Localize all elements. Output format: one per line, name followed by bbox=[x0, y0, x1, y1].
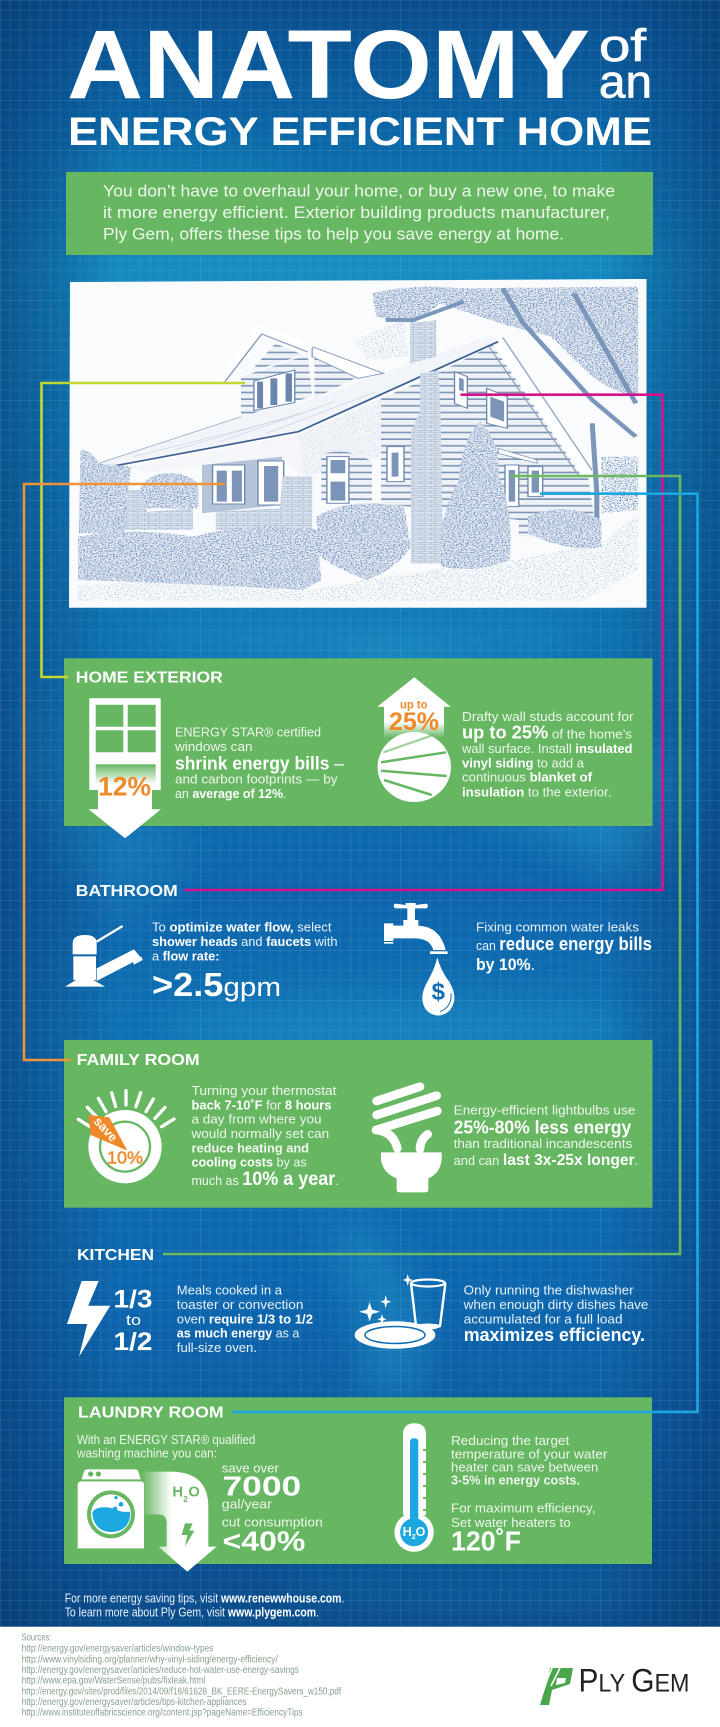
text: windows tip: windows can bbox=[174, 739, 252, 754]
text: oven tip: oven require 1/3 to 1/2 bbox=[177, 1311, 313, 1326]
footer panel bbox=[0, 1627, 720, 1727]
icon: lightning bolt with fractions: 1/3 bbox=[114, 1285, 152, 1313]
text: sources bbox=[22, 1633, 341, 1719]
text: water heater tip: 120˚F bbox=[451, 1526, 521, 1557]
connector: bathroom bbox=[184, 395, 662, 890]
text: water flow tip: To optimize water flow, select bbox=[152, 920, 332, 935]
icon: thermometer bbox=[394, 1423, 434, 1552]
heading: home exterior: HOME EXTERIOR bbox=[76, 670, 223, 687]
shrubs and grass bbox=[78, 422, 638, 601]
chimney bbox=[410, 320, 436, 363]
text: lightbulb tip: and can last 3x-25x longer. bbox=[454, 1152, 638, 1169]
eave and side windows bbox=[498, 448, 537, 463]
text: sources: http://www.vinylsiding.org/planner/why-vinyl-siding/energy-efficiency/ bbox=[22, 1654, 278, 1665]
text: dishwasher tip: accumulated for a full load bbox=[464, 1311, 623, 1326]
text: windows tip bbox=[174, 725, 345, 801]
logo: Ply Gem bbox=[540, 1663, 690, 1705]
icon: thermostat dial: save bbox=[91, 1114, 120, 1145]
text: sources: http://energy.gov/energysaver/articles/window-types bbox=[22, 1644, 213, 1655]
intro panel: You don’t have to overhaul your home, or buy a new one, to make bbox=[103, 182, 615, 200]
text: oven tip: toaster or convection bbox=[177, 1297, 304, 1312]
icon: washing machine with water arrow bbox=[78, 1469, 217, 1572]
icon: thermostat dial bbox=[78, 1091, 174, 1183]
text: water flow tip: shower heads and faucets with bbox=[152, 934, 338, 949]
text: oven tip bbox=[177, 1282, 313, 1355]
heading: family room: FAMILY ROOM bbox=[77, 1052, 200, 1069]
text: more info links: To learn more about Ply Gem, visit www.plygem.com. bbox=[65, 1605, 319, 1619]
text: wall studs tip bbox=[461, 709, 634, 799]
text: windows tip: and carbon footprints — by bbox=[175, 772, 338, 787]
text: leaks tip bbox=[476, 920, 652, 974]
icon: washing machine with water arrow: O bbox=[188, 1485, 200, 1501]
title: Energy Efficient Home: ENERGY EFFICIENT HOME bbox=[68, 110, 652, 154]
text: water heater tip: 3-5% in energy costs. bbox=[451, 1473, 580, 1488]
panel: laundry room bbox=[64, 1397, 652, 1572]
text: sources: http://energy.gov/energysaver/articles/tips-kitchen-appliances bbox=[22, 1697, 247, 1708]
icon: mixer faucet bbox=[65, 926, 143, 987]
photo: house sketch bbox=[69, 279, 646, 608]
text: wall studs tip: Drafty wall studs account for bbox=[462, 709, 634, 724]
text: dishwasher tip: when enough dirty dishes have bbox=[463, 1297, 648, 1312]
intro panel: Ply Gem, offers these tips to help you save energy at home. bbox=[103, 224, 564, 244]
text: thermostat tip: Turning your thermostat bbox=[192, 1083, 337, 1098]
text: windows tip: ENERGY STAR® certified bbox=[175, 725, 321, 740]
icon: thermometer: 2 bbox=[412, 1534, 416, 1541]
connector: family room bbox=[24, 484, 225, 1060]
text: washer intro: washing machine you can: bbox=[76, 1445, 217, 1460]
gable roof edge bbox=[495, 337, 588, 473]
panel: family room bbox=[64, 1040, 652, 1208]
text: lightbulb tip: 25%-80% less energy bbox=[454, 1117, 631, 1137]
heading: bathroom: BATHROOM bbox=[76, 883, 178, 900]
text: water savings stats bbox=[222, 1461, 323, 1557]
text: wall studs tip: insulation to the exterior. bbox=[462, 784, 612, 799]
text: thermostat tip: much as 10% a year. bbox=[192, 1169, 339, 1190]
icon: thermometer: O bbox=[416, 1525, 426, 1539]
text: lightbulb tip: Energy-efficient lightbulbs use bbox=[454, 1103, 635, 1118]
icon: lightning bolt with fractions bbox=[67, 1281, 152, 1357]
icon: thermometer: H bbox=[403, 1525, 412, 1539]
icon: dripping tap with dollar drop: $ bbox=[432, 978, 445, 1005]
icon: thermostat dial: 10% bbox=[107, 1147, 143, 1167]
heading: laundry room: LAUNDRY ROOM bbox=[78, 1405, 224, 1422]
text: thermostat tip: reduce heating and bbox=[192, 1140, 309, 1155]
text: water flow tip: >2.5gpm bbox=[152, 966, 281, 1003]
title: Anatomy of an: an bbox=[599, 56, 652, 108]
connector: home exterior bbox=[42, 383, 245, 677]
icon: washing machine with water arrow: H bbox=[172, 1485, 183, 1501]
text: water savings stats: cut consumption bbox=[222, 1515, 323, 1530]
text: windows tip: an average of 12%. bbox=[175, 786, 286, 801]
icon: insulated wall with up arrow bbox=[377, 677, 451, 802]
dormer bbox=[220, 328, 383, 417]
foliage behind house bbox=[354, 287, 638, 533]
text: wall studs tip: up to 25% of the home’s bbox=[462, 723, 632, 743]
icon: CFL lightbulb bbox=[376, 1087, 442, 1192]
icon: window with down arrow: 12% bbox=[98, 771, 151, 801]
connector: kitchen bbox=[163, 476, 680, 1254]
text: more info links: For more energy saving tips, visit www.renewwhouse.com. bbox=[65, 1591, 344, 1605]
section: kitchen bbox=[67, 1247, 648, 1357]
text: wall studs tip: vinyl siding to add a bbox=[462, 755, 585, 770]
text: oven tip: as much energy as a bbox=[177, 1326, 300, 1341]
text: water savings stats: gal/year bbox=[222, 1496, 272, 1511]
text: wall studs tip: continuous blanket of bbox=[462, 770, 593, 785]
text: washer intro bbox=[76, 1432, 255, 1460]
icon: washing machine with water arrow: 2 bbox=[183, 1495, 188, 1504]
text: leaks tip: can reduce energy bills bbox=[476, 934, 652, 954]
text: lightbulb tip bbox=[454, 1103, 638, 1169]
text: sources: http://energy.gov/sites/prod/files/2014/09/f18/61628_BK_EERE-EnergySavers_w150.pdf bbox=[22, 1686, 341, 1697]
text: water savings stats: 7000 bbox=[222, 1471, 301, 1502]
text: water savings stats: <40% bbox=[222, 1526, 305, 1557]
text: windows tip: shrink energy bills – bbox=[175, 752, 345, 773]
text: oven tip: Meals cooked in a bbox=[177, 1282, 283, 1297]
text: dishwasher tip: Only running the dishwasher bbox=[464, 1282, 634, 1297]
icon: window with down arrow bbox=[88, 698, 161, 838]
text: water heater tip: Set water heaters to bbox=[451, 1515, 571, 1530]
text: water flow tip bbox=[152, 920, 338, 1003]
text: water heater tip: For maximum efficiency, bbox=[451, 1500, 596, 1515]
main roof bbox=[99, 335, 498, 467]
icon: dripping tap with dollar drop bbox=[384, 903, 454, 1016]
intro panel bbox=[66, 172, 653, 255]
upper windows bbox=[455, 372, 507, 428]
text: thermostat tip bbox=[190, 1083, 339, 1190]
text: thermostat tip: a day from where you bbox=[192, 1112, 322, 1127]
text: sources: http://www.epa.gov/WaterSense/pubs/fixleak.html bbox=[22, 1676, 205, 1687]
text: water flow tip: a flow rate: bbox=[152, 948, 220, 963]
text: thermostat tip: would normally set can bbox=[190, 1126, 329, 1141]
text: water heater tip: Reducing the target bbox=[451, 1433, 570, 1448]
text: water savings stats: save over bbox=[222, 1461, 279, 1476]
porch bbox=[122, 452, 372, 530]
icon: insulated wall with up arrow: up to bbox=[400, 697, 428, 711]
text: water heater tip bbox=[451, 1433, 608, 1557]
text: sources: http://energy.gov/energysaver/articles/reduce-hot-water-use-energy-savings bbox=[22, 1665, 299, 1676]
text: sources: Sources: bbox=[22, 1633, 51, 1644]
heading: kitchen: KITCHEN bbox=[77, 1247, 154, 1264]
panel: home exterior bbox=[64, 658, 652, 838]
text: wall studs tip: wall surface. Install insulated bbox=[461, 741, 632, 756]
gable wall bbox=[381, 345, 597, 537]
stucco front bbox=[129, 398, 381, 477]
text: lightbulb tip: than traditional incandescents bbox=[454, 1136, 633, 1151]
title: Anatomy of an: of bbox=[599, 20, 647, 71]
text: water heater tip: heater can save between bbox=[451, 1460, 598, 1475]
icon: lightning bolt with fractions: 1/2 bbox=[114, 1328, 152, 1356]
intro panel: it more energy efficient. Exterior building products manufacturer, bbox=[103, 203, 610, 222]
connector: laundry room bbox=[232, 494, 698, 1412]
text: dishwasher tip: maximizes efficiency. bbox=[464, 1325, 645, 1345]
icon: clean glass and plate bbox=[355, 1274, 445, 1349]
text: leaks tip: by 10%. bbox=[476, 956, 535, 974]
logo: Ply Gem: PLY GEM bbox=[578, 1663, 690, 1699]
text: more info links bbox=[65, 1591, 344, 1619]
section: bathroom bbox=[65, 883, 652, 1016]
text: oven tip: full-size oven. bbox=[177, 1340, 257, 1355]
text: sources: http://www.instituteoffabricscience.org/content.jsp?pageName=EfficiencyTips bbox=[22, 1708, 303, 1719]
icon: lightning bolt with fractions: to bbox=[126, 1312, 141, 1329]
text: water heater tip: temperature of your water bbox=[451, 1446, 608, 1461]
title: Anatomy of an: ANATOMY bbox=[67, 10, 590, 119]
text: leaks tip: Fixing common water leaks bbox=[476, 920, 639, 935]
text: thermostat tip: cooling costs by as bbox=[192, 1155, 307, 1170]
text: thermostat tip: back 7-10˚F for 8 hours bbox=[192, 1097, 332, 1112]
text: washer intro: With an ENERGY STAR® qualified bbox=[77, 1432, 255, 1447]
text: dishwasher tip bbox=[463, 1282, 648, 1345]
icon: insulated wall with up arrow: 25% bbox=[389, 708, 439, 736]
